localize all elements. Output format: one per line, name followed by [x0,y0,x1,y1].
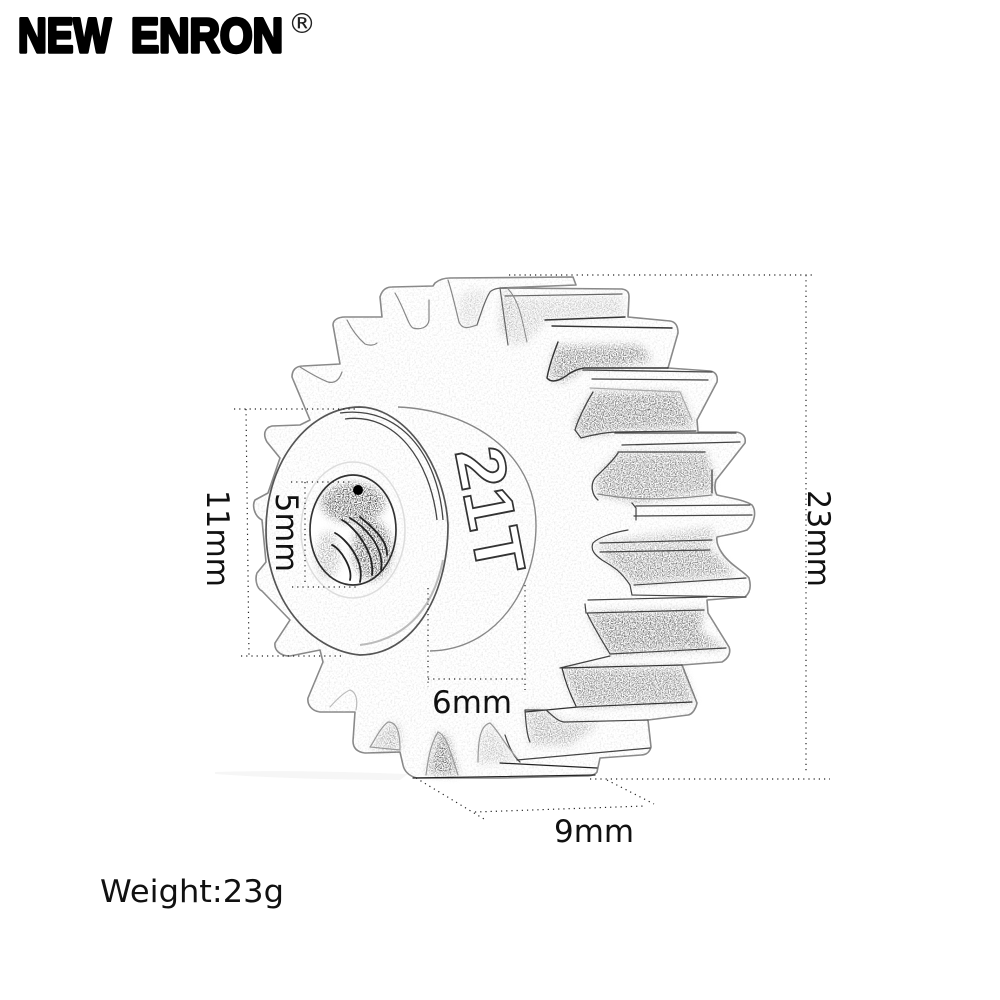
hub front face [266,407,448,655]
logo: NEW ENRON: ® [288,7,316,40]
hub speckle [266,405,536,655]
hole shading [316,483,392,580]
label: 6mm: 6mm [432,685,512,721]
label: 11mm: 11mm [199,490,235,587]
hub hole ring [301,462,405,598]
weight note: Weight:23g [100,874,284,910]
tooth outlines [300,280,752,778]
dotted dimension lines [234,275,830,819]
hole speck [353,485,363,495]
label: 23mm: 23mm [800,490,836,587]
threaded hole [310,475,396,585]
hub outline [398,407,536,651]
logo: NEW ENRON: NEW [18,10,112,63]
gear illustration [250,275,760,780]
label: 9mm: 9mm [554,814,634,850]
hub body [266,405,536,655]
logo: NEW ENRON [18,7,316,63]
tooth shading [370,288,735,775]
embossed text: 21T: 21T [440,440,539,581]
ground shadow [215,771,408,780]
label: 5mm: 5mm [268,493,304,572]
surface speckle [250,275,760,780]
logo: NEW ENRON: ENRON [131,10,283,63]
gear silhouette [254,277,755,778]
threads [332,517,387,582]
